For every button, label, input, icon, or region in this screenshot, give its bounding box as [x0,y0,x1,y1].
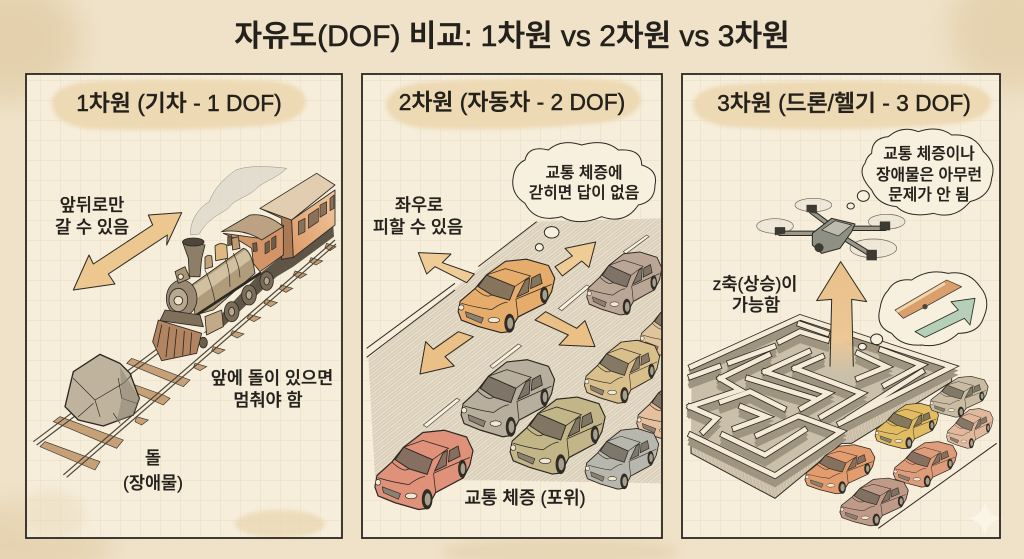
heading: 3차원: 3차원 (드론/헬기 - 3 DOF) [717,90,971,116]
thought bubble: top [847,129,993,215]
heading blob: 3차원 [693,81,991,129]
illustration: road with traffic [367,143,710,510]
cars: surrounding traffic [375,252,710,510]
text: forward and back only: 갈 수 있음 [55,217,129,237]
panel: 2차원 자동차 [361,73,663,539]
text: no problem thought: 교통 체증이나 [883,145,975,163]
illustration: maze, drone and cars [690,129,1003,535]
boiler [166,237,255,317]
text: no problem thought: 문제가 안 됨 [888,186,970,204]
train: steam, carriage and locomotive [153,167,335,361]
icon: sparkle watermark [967,502,1003,535]
text: z axis: z축(상승)이 [713,274,797,294]
text: traffic label: 교통 체증 (포위) [464,488,586,508]
text: dodge left/right: 좌우로 [395,195,443,215]
cab [222,215,283,272]
text: stop at rock: 멈춰야 함 [233,390,303,410]
heading: 1차원: 1차원 (기차 - 1 DOF) [76,90,282,116]
thought bubble: train and green arrow [858,272,987,350]
boulder [65,354,139,426]
steam [191,167,287,235]
arrow: upward z axis [817,262,867,373]
panel border [26,74,342,538]
road edge [878,443,997,528]
car: main [458,259,555,333]
arrow: left-down [420,332,473,374]
undercarriage [203,227,334,333]
railway track [33,240,336,477]
text: thought: 교통 체증에 [545,164,623,182]
panel border [362,74,662,538]
road surface [368,218,662,483]
text: dodge left/right: 피할 수 있음 [373,217,463,237]
text: stop at rock: 앞에 돌이 있으면 [211,368,333,388]
text: thought: 갇히면 답이 없음 [529,184,639,202]
title: 자유도(DOF) 비교: 1차원 vs 2차원 vs 3차원 [234,20,790,53]
heading blob: 2차원 [386,78,641,129]
heading blob: 1차원 [52,80,306,130]
lane dashes [423,235,649,427]
text: z axis: 가능함 [732,295,780,315]
panel: 1차원 기차 [15,74,342,541]
thought bubble [513,143,656,251]
cowcatcher [153,310,203,361]
cars: parked traffic [805,376,993,526]
heading: 2차원: 2차원 (자동차 - 2 DOF) [399,89,625,115]
text: rock label: 돌 [145,448,161,468]
text: no problem thought: 장애물은 아무런 [876,166,982,184]
icon: double arrow [73,213,182,290]
arrow: right-up [555,242,596,276]
panel: 3차원 드론/헬기 [682,74,1003,538]
illustration: train, track and boulder [33,167,336,477]
drone [757,198,905,260]
panel border [682,74,1000,538]
text: forward and back only: 앞뒤로만 [60,195,124,215]
arrow: right-down [535,312,595,347]
text: rock label: (장애물) [123,473,183,493]
arrow: left-up [418,253,474,283]
carriage [260,173,335,259]
maze [690,317,952,498]
running gear [197,272,273,348]
